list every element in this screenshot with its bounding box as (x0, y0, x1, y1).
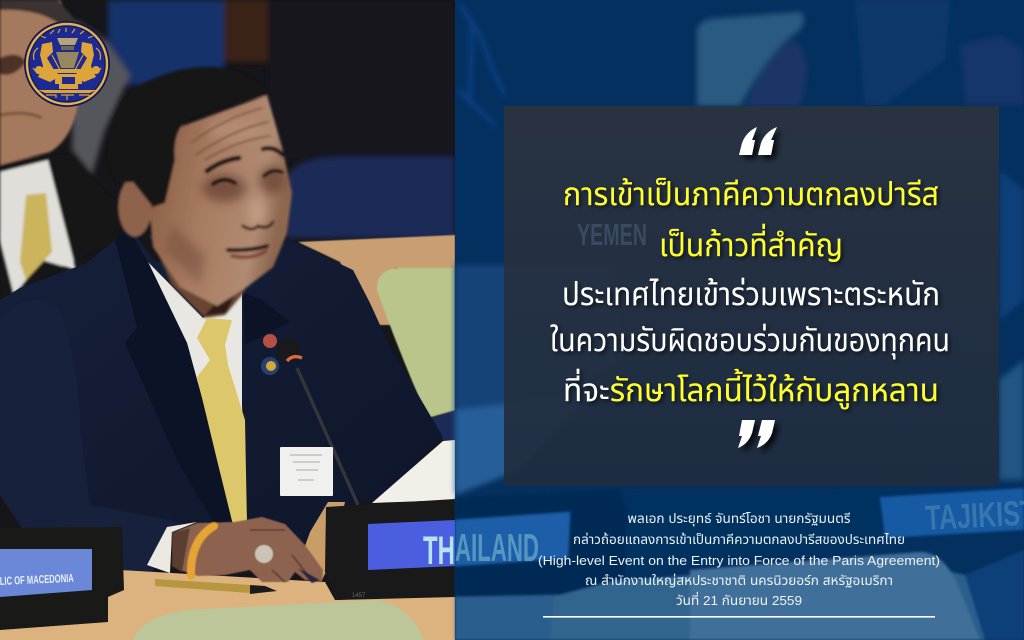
lower photo area: desk and cushion (455, 488, 1024, 640)
soft facial shading (165, 118, 285, 285)
pen (155, 579, 277, 594)
quote text (550, 176, 950, 410)
nameplate: Macedonia (0, 527, 124, 630)
speaker: lapel shadow (115, 228, 237, 525)
lions (35, 42, 100, 93)
plate text: Thailand: AILAND (455, 527, 539, 570)
quote text: ประเทศไทยเข้าร่วมเพราะตระหนัก (562, 276, 940, 312)
neighbouring delegate (0, 0, 91, 294)
speaker: yellow tie (197, 318, 247, 525)
speaker: lapel pins (261, 334, 279, 375)
caption text: (High-level Event on the Entry into Force of the Paris Agreement) (538, 553, 940, 568)
nameplate: Thailand (325, 499, 455, 600)
white paper (372, 440, 455, 503)
speaker: sleeve (0, 415, 180, 572)
microphone (277, 338, 358, 505)
quote text: เป็นก้าวที่สำคัญ (659, 223, 843, 263)
closing quote mark (738, 420, 775, 448)
caption text: ณ สำนักงานใหญ่สหประชาชาติ นครนิวยอร์ก สหรัฐอเมริกา (585, 573, 893, 588)
hand with ring and wristband (172, 517, 323, 583)
caption text: วันที่ 21 กันยายน 2559 (676, 591, 802, 608)
panel: quote box (504, 106, 999, 486)
speaker: suit jacket (0, 236, 443, 545)
urn (57, 38, 78, 45)
green cushion (133, 600, 424, 640)
panel: blue tinted photo background (455, 0, 1024, 640)
quote text: ที่จะรักษาโลกนี้ไว้ให้กับลูกหลาน (563, 368, 939, 410)
emblem: Thai government seal (24, 21, 110, 107)
faint plate text: Yemen: YEMEN (577, 217, 647, 252)
delegate badge (280, 447, 333, 496)
face details (192, 108, 283, 257)
background: table and green chair (298, 235, 455, 442)
quote text: ในความรับผิดชอบร่วมกันของทุกคน (550, 322, 950, 359)
desk (0, 570, 455, 640)
caption text: กล่าวถ้อยแถลงการเข้าเป็นภาคีความตกลงปารีสของประเทศไทย (573, 532, 905, 547)
base pattern (46, 95, 89, 100)
plate text: Thailand: TH (423, 529, 455, 573)
plate text: Thailand (423, 527, 539, 573)
nameplate: Macedonia: LIC OF MACEDONIA (0, 573, 74, 588)
speaker: shirt (148, 262, 247, 525)
panel: photo of speaker (0, 0, 455, 640)
background: blue jacket and seating (72, 0, 455, 238)
nameplate: Thailand: 1457 (352, 593, 366, 599)
quote text: การเข้าเป็นภาคีความตกลงปารีส (563, 176, 939, 212)
shirt cuff (147, 522, 197, 573)
caption text: พลเอก ประยุทธ์ จันทร์โอชา นายกรัฐมนตรี (628, 511, 850, 526)
opening quote mark (739, 127, 777, 155)
speaker: neck and head (107, 67, 292, 318)
caption text (538, 511, 940, 608)
